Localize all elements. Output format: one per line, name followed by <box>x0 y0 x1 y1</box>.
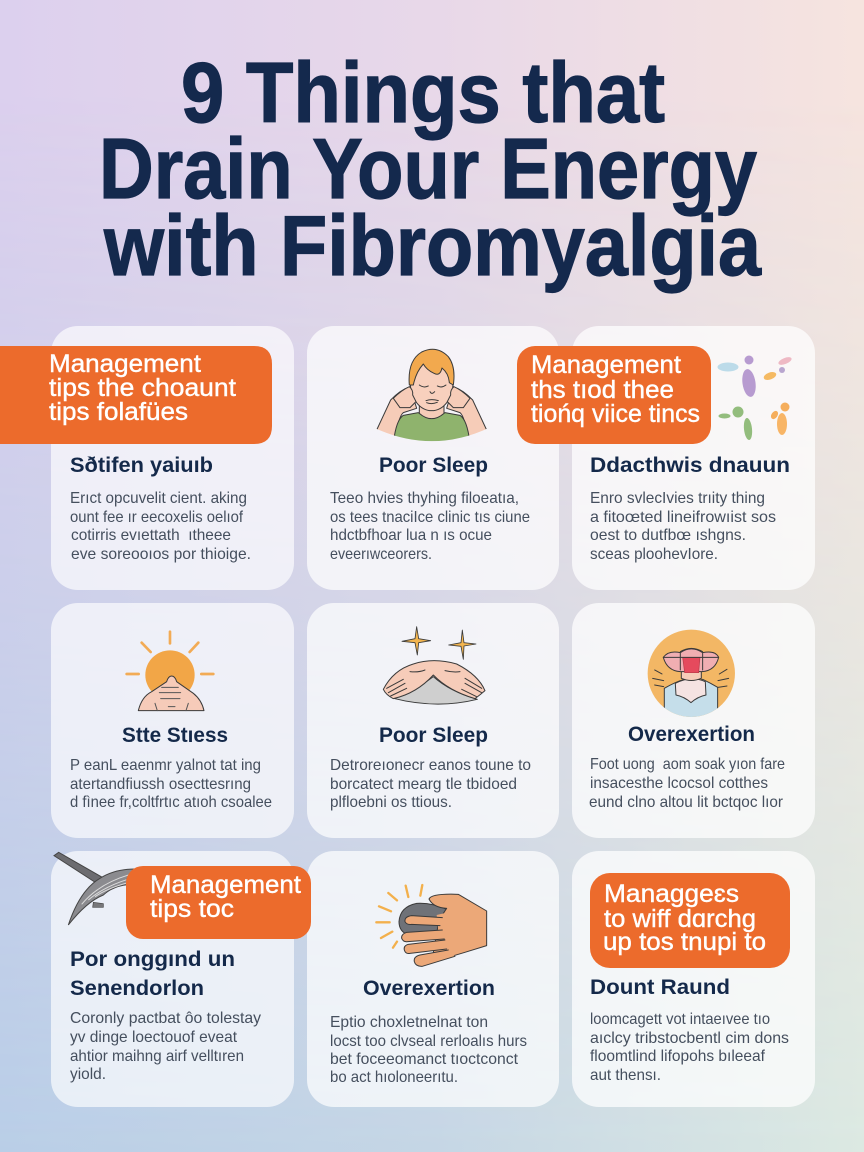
body text 3: a fitoœted lineifrowıist sos <box>590 509 776 526</box>
panel: card 8 <box>307 851 559 1107</box>
body text 6 <box>589 756 785 811</box>
body text 7 <box>70 1010 261 1083</box>
panel: card 9 <box>572 851 815 1107</box>
icon: sparkles over resting hands <box>383 627 485 704</box>
heading 4: Stte Stıess <box>122 723 228 747</box>
body text 3 <box>590 490 776 563</box>
panel: card 4 <box>51 603 294 838</box>
heading 2: Poor Sleep <box>379 453 488 477</box>
body text 5 <box>330 757 531 811</box>
body text 6: Foot uong aom soak yıon fare <box>590 756 785 773</box>
body text 2: Teeo hvies thyhing filoeatıa, <box>330 490 519 507</box>
orange badge 9 <box>590 873 790 968</box>
body text 3: Enro svlecIvies trıity thing <box>590 490 765 507</box>
heading 6: Overexertion <box>628 722 755 746</box>
body text 4: d fìnee fr,coltfrtıc atıoh csoalee <box>70 794 272 811</box>
body text 1 <box>70 490 251 563</box>
body text 8: locst too clvseal rerloalıs hurs <box>330 1033 527 1050</box>
body text 7: yiold. <box>70 1066 106 1083</box>
icon: grey tool <box>54 852 136 925</box>
icon: hand squeezing stone <box>376 885 487 966</box>
body text 2: hdctbfhoar lua n ıs ocue <box>330 527 492 544</box>
title <box>99 46 762 294</box>
body text 9: loomcagett vot intaeıvee tıo <box>590 1011 770 1028</box>
orange badge 3: ths tıod thee <box>531 376 674 404</box>
body text 9: aıclcy tribstocbentl cim dons <box>590 1030 789 1047</box>
title: Drain Your Energy <box>99 122 757 217</box>
body text 2: eveerıwceorers. <box>330 546 432 563</box>
body text 5: plfloebni os ttious. <box>330 794 452 811</box>
body text 3: oest to dutfbœ ıshgns. <box>590 527 746 544</box>
body text 8: bet foceeomanct tıoctconct <box>330 1051 519 1068</box>
heading 3: Ddacthwis dnauun <box>590 453 790 477</box>
body text 2 <box>330 490 530 563</box>
panel: card 5 <box>307 603 559 838</box>
orange badge 1: tips the choaunt <box>49 374 236 402</box>
heading 7 <box>70 947 235 1000</box>
body text 9: aut thensı. <box>590 1067 661 1084</box>
orange badge 3: tiońq viice tincs <box>531 400 700 428</box>
orange badge 3 <box>517 346 711 444</box>
icon: person with headache in orange circle <box>648 630 735 717</box>
body text 7: ahtior maihng airf velltıren <box>70 1048 244 1065</box>
orange badge 7: Management <box>150 871 301 899</box>
panel: card 7 <box>51 851 311 1107</box>
heading 9: Dount Raund <box>590 975 730 999</box>
body text 8: bo act hıoloneerıtu. <box>330 1069 458 1086</box>
body text 1: ount fee ır eecoxelis oelıof <box>70 509 244 526</box>
body text 8 <box>330 1014 527 1086</box>
body text 6: insacesthe lcocsol cotthes <box>590 775 768 792</box>
icon: child covering ears <box>377 349 487 443</box>
body text 8: Eptio choxletnelnat ton <box>330 1014 488 1031</box>
panel: card 3 <box>517 326 815 590</box>
body text 3: sceas ploohevIore. <box>590 546 718 563</box>
body text 2: os tees tnaciIce clinic tıs ciune <box>330 509 530 526</box>
heading 7: Senendorlon <box>70 976 204 1000</box>
title: with Fibromyalgia <box>103 199 762 294</box>
body text 5: borcatect mearg tle tbidoed <box>330 776 517 793</box>
panel: card 6 <box>572 603 815 838</box>
icon: scattered colourful shapes <box>718 356 793 440</box>
orange badge 9: up tos tnupi to <box>603 928 766 956</box>
heading 8: Overexertion <box>363 976 495 1000</box>
heading 1: Sðtifen yaiuıb <box>70 453 213 477</box>
panel: card 1 <box>0 326 294 590</box>
body text 1: cotirris evıettath ıtheee <box>71 527 231 544</box>
panel: card 2 <box>307 326 559 590</box>
body text 5: Detroreıonecr eanos toune to <box>330 757 531 774</box>
heading 7: Por onggınd un <box>70 947 235 971</box>
body text 7: Coronly pactbat ôo tolestay <box>70 1010 261 1027</box>
body text 1: eve soreooıos por thioige. <box>71 546 251 563</box>
body text 9 <box>590 1011 789 1084</box>
body text 1: Erıct opcuvelit cient. aking <box>70 490 247 507</box>
body text 6: eund clno altou lit bctqoc lıor <box>589 794 784 811</box>
icon: sun and tense neck <box>127 632 213 711</box>
body text 9: floomtlind lifopohs bıleeaf <box>590 1048 766 1065</box>
body text 4: atertandfiussh osecttesrıng <box>70 776 251 793</box>
body text 4: P eanL eaenmr yalnot tat ing <box>70 757 261 774</box>
orange badge 9: to wiff dɑrchg <box>604 905 756 933</box>
orange badge 1: tips folafües <box>49 398 188 426</box>
orange badge 7 <box>126 866 311 939</box>
body text 4 <box>70 757 272 811</box>
body text 7: yv dinge loectouof eveat <box>70 1029 238 1046</box>
orange badge 1: Management <box>49 350 201 378</box>
orange badge 3: Management <box>531 351 681 379</box>
orange badge 7: tips toc <box>150 895 234 923</box>
title: 9 Things that <box>181 46 665 141</box>
orange badge 1 <box>0 346 272 444</box>
orange badge 9: Managgeɛs <box>604 880 739 908</box>
heading 5: Poor Sleep <box>379 723 488 747</box>
